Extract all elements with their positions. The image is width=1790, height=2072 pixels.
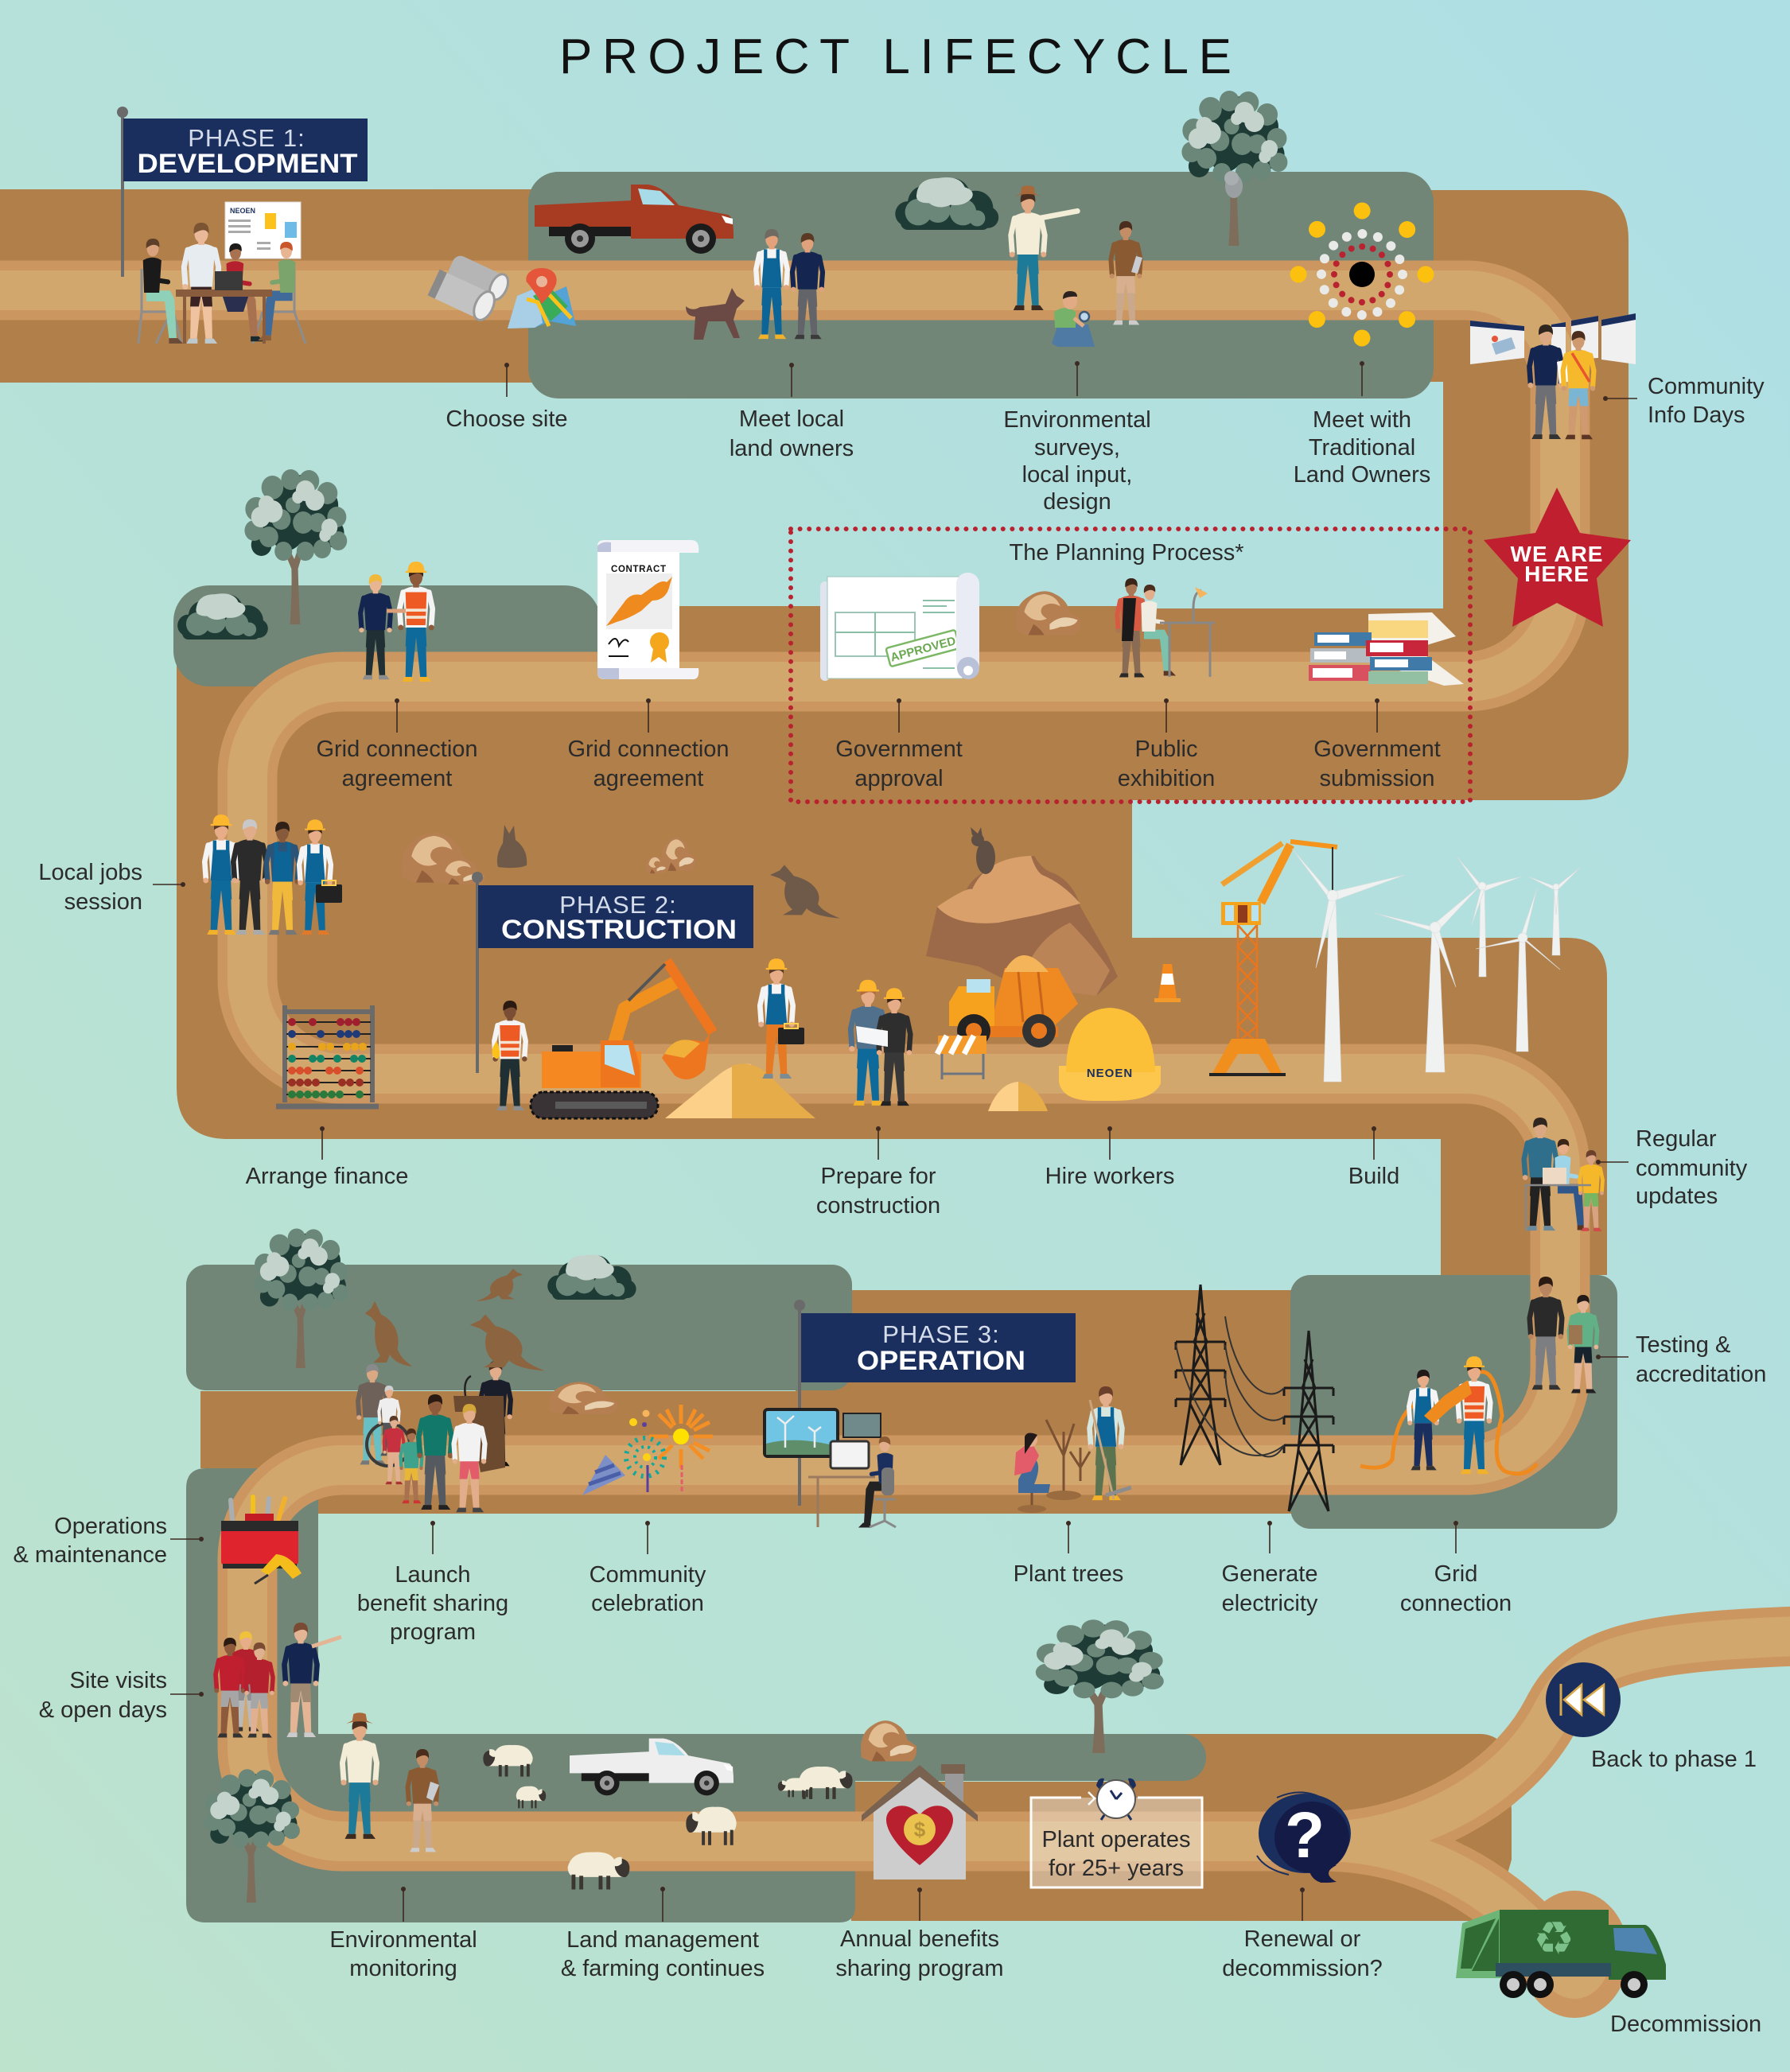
label: hire workers — [1045, 1126, 1174, 1189]
icon: rock by planning — [1015, 591, 1080, 635]
label: environmental surveys: local input, — [1022, 462, 1132, 488]
we are here star — [1484, 488, 1631, 627]
label: meet with traditional land owners: Land Owners — [1294, 462, 1430, 488]
label: site visits and open days: Site visits — [70, 1668, 167, 1693]
icon: team meeting at table: NEOEN — [230, 207, 255, 215]
label: testing and accreditation: accreditation — [1636, 1362, 1766, 1387]
phase 1 flag: DEVELOPMENT — [137, 149, 358, 179]
icon: team meeting at table — [138, 202, 305, 344]
icon: kangaroo standing — [365, 1301, 413, 1366]
label: local jobs session — [38, 860, 185, 915]
label: testing and accreditation — [1596, 1332, 1766, 1387]
label: prepare for construction — [816, 1126, 940, 1219]
label: build: Build — [1348, 1164, 1399, 1189]
icon: excavator — [531, 961, 713, 1118]
icon: grid connection plug and cable — [1360, 1356, 1537, 1474]
label: local jobs session: session — [64, 889, 142, 915]
icon: Neoen hard hat — [1059, 1008, 1161, 1101]
terrain: green land — [173, 172, 1617, 1922]
label: renewal or decommission: decommission? — [1222, 1956, 1383, 1981]
label: community info days: Community — [1648, 374, 1765, 399]
label: government approval: Government — [835, 737, 963, 762]
label: environmental surveys — [1003, 361, 1151, 515]
label: environmental monitoring — [329, 1887, 477, 1981]
icon: rock small — [646, 838, 695, 873]
icon: rocks near jobs — [402, 833, 485, 884]
icon: benefit sharing house — [862, 1764, 978, 1880]
label: renewal or decommission: Renewal or — [1244, 1926, 1361, 1952]
icon: plant rock — [548, 1382, 617, 1414]
icon: wallaby — [770, 865, 840, 919]
heading: planning process: The Planning Process* — [1009, 540, 1244, 566]
label: prepare for construction: construction — [816, 1193, 940, 1219]
label: generate electricity: electricity — [1222, 1591, 1318, 1616]
icon: woman monitoring — [407, 1749, 439, 1852]
we are here star: WE ARE — [1511, 542, 1603, 566]
title: PROJECT LIFECYCLE — [559, 29, 1232, 84]
icon: binoculars — [427, 253, 512, 323]
phase 3 flag: PHASE 3: — [882, 1320, 1000, 1348]
phase 3 flag: OPERATION — [857, 1346, 1025, 1376]
phase 2 flag: CONSTRUCTION — [501, 915, 737, 945]
icon: worker with lightbulb — [492, 1001, 527, 1110]
label: grid connection: Grid — [1434, 1561, 1477, 1587]
icon: recycling truck — [1456, 1910, 1666, 1998]
label: arrange finance: Arrange finance — [246, 1164, 408, 1189]
label: launch benefit sharing program: program — [390, 1619, 476, 1645]
icon: approved plans: APPROVED — [889, 634, 957, 665]
label: meet local land owners: Meet local — [739, 406, 844, 432]
icon: red pickup truck — [535, 185, 734, 254]
icon: contract scroll — [597, 540, 698, 679]
label: grid connection agreement 1: Grid connection — [316, 737, 478, 762]
label: grid connection agreement 1: agreement — [342, 766, 452, 791]
label: regular community updates — [1596, 1126, 1748, 1209]
label: prepare for construction: Prepare for — [820, 1164, 936, 1189]
icon: question bubble: ? — [1285, 1799, 1325, 1872]
label: regular community updates: updates — [1636, 1184, 1718, 1209]
label: testing and accreditation: Testing & — [1636, 1332, 1730, 1358]
label: grid connection agreement 2 — [567, 698, 730, 791]
label: build — [1348, 1126, 1399, 1189]
icon: recycling truck: ♻ — [1533, 1911, 1574, 1965]
label: hire workers: Hire workers — [1045, 1164, 1174, 1189]
label: grid connection: connection — [1400, 1591, 1512, 1616]
icon: handshake people — [359, 562, 434, 682]
label: community info days — [1603, 374, 1765, 428]
icon: fireworks and party popper — [582, 1405, 713, 1495]
icon: worker with toolbox — [758, 958, 804, 1079]
label: community celebration — [590, 1521, 706, 1616]
label: grid connection — [1400, 1521, 1512, 1616]
phase 1 flag: PHASE 1: — [188, 124, 305, 152]
icon: sheep flock — [483, 1745, 853, 1889]
label: plant trees — [1014, 1521, 1123, 1587]
icon: toolbox and drill — [221, 1497, 302, 1584]
icon: surveyor pointing — [1010, 185, 1077, 310]
icon: local job seekers — [203, 814, 342, 935]
label: grid connection agreement 2: Grid connection — [567, 737, 730, 762]
icon: alarm clock — [1096, 1778, 1136, 1820]
label: public exhibition: Public — [1134, 737, 1198, 762]
label: annual benefits sharing program: Annual benefits — [840, 1926, 999, 1952]
icon: abacus — [276, 1005, 379, 1106]
label: community celebration: Community — [590, 1562, 706, 1588]
icon: site visit group — [214, 1623, 341, 1738]
label: environmental monitoring: Environmental — [329, 1927, 477, 1953]
label: environmental surveys: design — [1043, 489, 1111, 515]
icon: approved plans — [820, 573, 979, 681]
icon: crouching person with magnifier — [1052, 291, 1095, 347]
label: back to phase 1: Back to phase 1 — [1591, 1747, 1757, 1772]
icon: tree row 2 — [244, 469, 347, 624]
label: decommission: Decommission — [1610, 2012, 1761, 2037]
label: renewal or decommission — [1222, 1887, 1383, 1981]
icon: control room workstation — [765, 1409, 896, 1527]
label: public exhibition: exhibition — [1118, 766, 1215, 791]
icon: question bubble — [1257, 1792, 1351, 1883]
label: government submission — [1313, 698, 1441, 791]
icon: white ute — [570, 1739, 734, 1795]
label: government submission: submission — [1319, 766, 1435, 791]
label: meet local land owners — [730, 363, 854, 461]
icon: farmer and land owner — [754, 229, 824, 339]
icon: map with pin — [508, 268, 576, 328]
label: meet with traditional land owners — [1294, 361, 1430, 488]
icon: surveyor monitoring — [340, 1712, 379, 1839]
icon: traffic cone — [1154, 964, 1181, 1002]
label: land management and farming: & farming continues — [561, 1956, 765, 1981]
label: generate electricity: Generate — [1222, 1561, 1317, 1587]
label: regular community updates: community — [1636, 1156, 1748, 1181]
label: site visits and open days — [39, 1668, 204, 1723]
icon: Neoen hard hat: NEOEN — [1087, 1067, 1133, 1080]
icon: tree row 5 left — [204, 1769, 300, 1903]
icon: engineers with plans — [849, 980, 912, 1106]
label: annual benefits sharing program — [835, 1887, 1004, 1981]
label: operations and maintenance: Operations — [54, 1514, 167, 1539]
label: meet with traditional land owners: Meet with — [1313, 407, 1411, 433]
label: government submission: Government — [1313, 737, 1441, 762]
icon: transmission pylons and lines — [1176, 1285, 1333, 1511]
icon: tree planters — [1014, 1386, 1131, 1513]
icon: information boards — [1470, 313, 1636, 364]
label: arrange finance — [246, 1126, 408, 1189]
label: operations and maintenance: & maintenance — [14, 1542, 167, 1568]
label: operations and maintenance — [14, 1514, 204, 1568]
label: choose site: Choose site — [446, 406, 568, 432]
label: land management and farming — [561, 1887, 765, 1981]
icon: tree with koala — [1181, 91, 1287, 246]
icon: benefit program launch crowd — [356, 1361, 512, 1512]
label: environmental surveys: surveys, — [1034, 435, 1120, 461]
label: choose site — [446, 363, 568, 432]
icon: bush row 2 — [177, 593, 268, 639]
icon: dog — [686, 288, 745, 340]
label: annual benefits sharing program: sharing program — [835, 1956, 1004, 1981]
phase 3 flag — [794, 1300, 1076, 1506]
icon: kangaroo bounding — [470, 1314, 545, 1371]
phase 2 flag: PHASE 2: — [559, 891, 677, 919]
icon: community update group — [1523, 1118, 1604, 1231]
label: public exhibition — [1118, 698, 1215, 791]
label: environmental monitoring: monitoring — [349, 1956, 457, 1981]
icon: tree row 3 — [254, 1228, 348, 1368]
icon: contract scroll: CONTRACT — [611, 565, 666, 574]
icon: benefit sharing house: $ — [914, 1817, 926, 1841]
icon: two people at community info day — [1528, 325, 1595, 439]
we are here star: HERE — [1524, 562, 1590, 586]
icon: public exhibition desk scene — [1116, 578, 1215, 677]
label: launch benefit sharing program — [357, 1521, 508, 1645]
label: launch benefit sharing program: Launch — [395, 1562, 471, 1588]
label: government approval: approval — [854, 766, 944, 791]
label: plant trees: Plant trees — [1014, 1561, 1123, 1587]
callout: plant operates 25+ years: Plant operates — [1041, 1827, 1191, 1852]
label: launch benefit sharing program: benefit sharing — [357, 1591, 508, 1616]
label: grid connection agreement 1 — [316, 698, 478, 791]
terrain: brown land — [0, 189, 1629, 1921]
label: government approval — [835, 698, 963, 791]
label: local jobs session: Local jobs — [38, 860, 142, 885]
icon: bush — [895, 177, 998, 230]
label: regular community updates: Regular — [1636, 1126, 1717, 1152]
label: meet local land owners: land owners — [730, 436, 854, 461]
icon: wind turbines — [1292, 849, 1580, 1082]
label: community info days: Info Days — [1648, 402, 1745, 428]
label: grid connection agreement 2: agreement — [593, 766, 703, 791]
icon: bush row 3 — [547, 1254, 636, 1300]
icon: tree row 5 right — [1036, 1619, 1164, 1753]
icon: large rock with wallaby — [926, 827, 1118, 996]
icon: small sand pile — [988, 1082, 1048, 1111]
label: environmental surveys: Environmental — [1003, 407, 1151, 433]
icon: woman with clipboard — [1110, 221, 1142, 325]
icon: back to phase 1 button — [1546, 1662, 1621, 1737]
label: community celebration: celebration — [591, 1591, 704, 1616]
icon: road barrier — [937, 1036, 986, 1079]
label: meet with traditional land owners: Traditional — [1309, 435, 1415, 461]
planning process border — [791, 529, 1470, 802]
phase 1 flag — [117, 107, 368, 277]
icon: sand pile — [665, 1064, 815, 1118]
icon: dump truck — [949, 955, 1078, 1048]
icon: folders and paperwork — [1309, 612, 1464, 686]
icon: testing inspectors — [1528, 1277, 1598, 1393]
phase 2 flag — [472, 872, 753, 1073]
icon: rock by house — [861, 1720, 916, 1761]
label: generate electricity — [1222, 1521, 1318, 1616]
icon: construction crane — [1209, 842, 1337, 1075]
label: site visits and open days: & open days — [39, 1697, 167, 1723]
icon: kangaroo small — [476, 1269, 523, 1301]
callout: plant operates 25+ years: for 25+ years — [1049, 1856, 1184, 1881]
label: land management and farming: Land management — [566, 1927, 759, 1953]
callout: plant operates 25+ years — [1031, 1792, 1202, 1887]
icon: wallaby with joey — [497, 825, 527, 868]
icon: traditional owners dot painting — [1298, 211, 1426, 338]
